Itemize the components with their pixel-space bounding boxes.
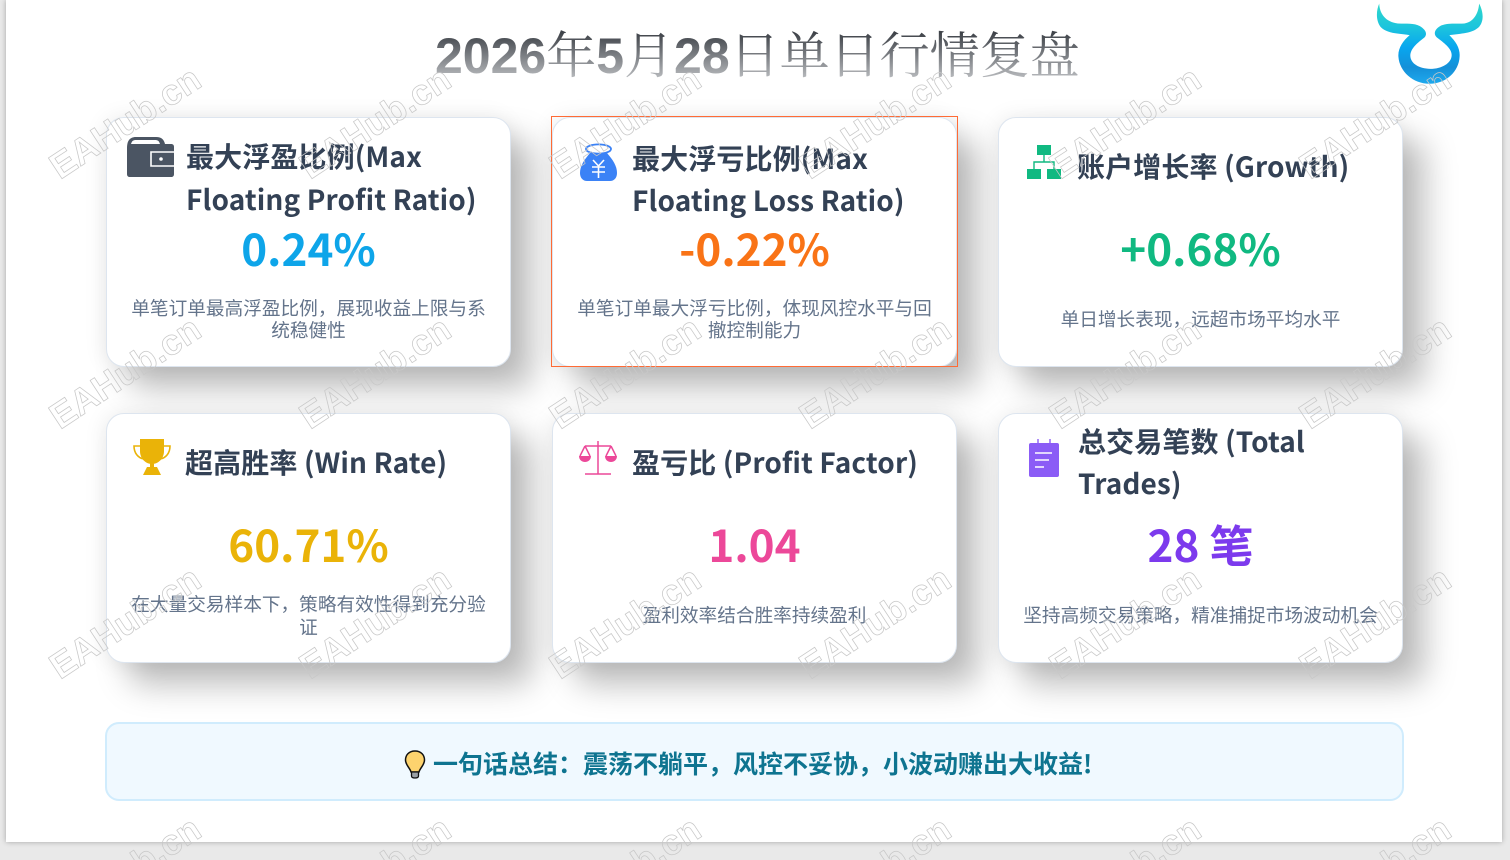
panel: win rate [106, 413, 511, 663]
watermark: EAHub.cn [42, 58, 208, 187]
icon: money bag [580, 144, 617, 181]
description line 2: 统稳健性 [271, 316, 346, 343]
panel: max floating profit [106, 117, 511, 367]
description: 盈利效率结合胜率持续盈利 [643, 601, 866, 628]
watermark: EAHub.cn [542, 58, 708, 187]
watermark: EAHub.cn [292, 58, 458, 187]
heading: growth: 账户增长率 (Growth) [1077, 146, 1349, 186]
watermark: EAHub.cn [42, 558, 208, 687]
heading: win rate: 超高胜率 (Win Rate) [185, 442, 447, 482]
value: 0.24%: 0.24% [241, 215, 376, 279]
description: 坚持高频交易策略，精准捕捉市场波动机会 [1023, 601, 1378, 628]
description line 2: 证 [299, 613, 318, 640]
heading: max floating profit: 最大浮盈比例(Max [186, 136, 422, 176]
watermark: EAHub.cn [292, 308, 458, 437]
value: 60.71%: 60.71% [228, 511, 389, 575]
heading line 2: Floating Loss Ratio) [632, 180, 905, 220]
panel: profit factor [552, 413, 957, 663]
icon: notepad [1029, 439, 1059, 477]
watermark: EAHub.cn [1042, 58, 1208, 187]
summary text: 一句话总结：震荡不躺平，风控不妥协，小波动赚出大收益! [433, 745, 1092, 781]
icon: balance scale [579, 441, 617, 475]
watermark: EAHub.cn [1042, 308, 1208, 437]
logo: bull head [1376, 4, 1483, 84]
watermark: EAHub.cn [792, 308, 958, 437]
heading line 2: Trades) [1078, 463, 1182, 503]
watermark: EAHub.cn [42, 308, 208, 437]
watermark: EAHub.cn [1292, 558, 1458, 687]
highlight frame [551, 116, 958, 367]
icon: trophy [133, 439, 171, 475]
description: 单日增长表现，远超市场平均水平 [1061, 305, 1340, 332]
value: +0.68%: +0.68% [1120, 215, 1281, 279]
panel: total trades [998, 413, 1403, 663]
value: -0.22%: -0.22% [679, 215, 830, 279]
summary banner [105, 722, 1404, 801]
watermark: EAHub.cn [1292, 308, 1458, 437]
description: 单笔订单最高浮盈比例，展现收益上限与系 [131, 294, 486, 321]
description: 在大量交易样本下，策略有效性得到充分验 [131, 590, 486, 617]
description line 2: 撤控制能力 [708, 316, 801, 343]
watermark: EAHub.cn [792, 558, 958, 687]
watermark: EAHub.cn [792, 58, 958, 187]
watermark: EAHub.cn [542, 558, 708, 687]
heading: max floating loss: 最大浮亏比例(Max [632, 138, 868, 178]
panel: max floating loss [552, 117, 957, 367]
heading: profit factor: 盈亏比 (Profit Factor) [632, 442, 918, 482]
watermark: EAHub.cn [292, 558, 458, 687]
watermark: EAHub.cn [1042, 558, 1208, 687]
watermark: EAHub.cn [542, 308, 708, 437]
icon: wallet [127, 137, 174, 177]
panel: growth [998, 117, 1403, 367]
description: 单笔订单最大浮亏比例，体现风控水平与回 [577, 294, 932, 321]
value: 28 trades: 28 笔 [1148, 511, 1253, 575]
heading line 2: Floating Profit Ratio) [186, 179, 477, 219]
icon: sitemap [1027, 145, 1061, 179]
value: 1.04: 1.04 [708, 511, 801, 575]
icon: light bulb [404, 750, 426, 779]
heading: total trades: 总交易笔数 (Total [1078, 421, 1305, 461]
watermark: EAHub.cn [1292, 58, 1458, 187]
